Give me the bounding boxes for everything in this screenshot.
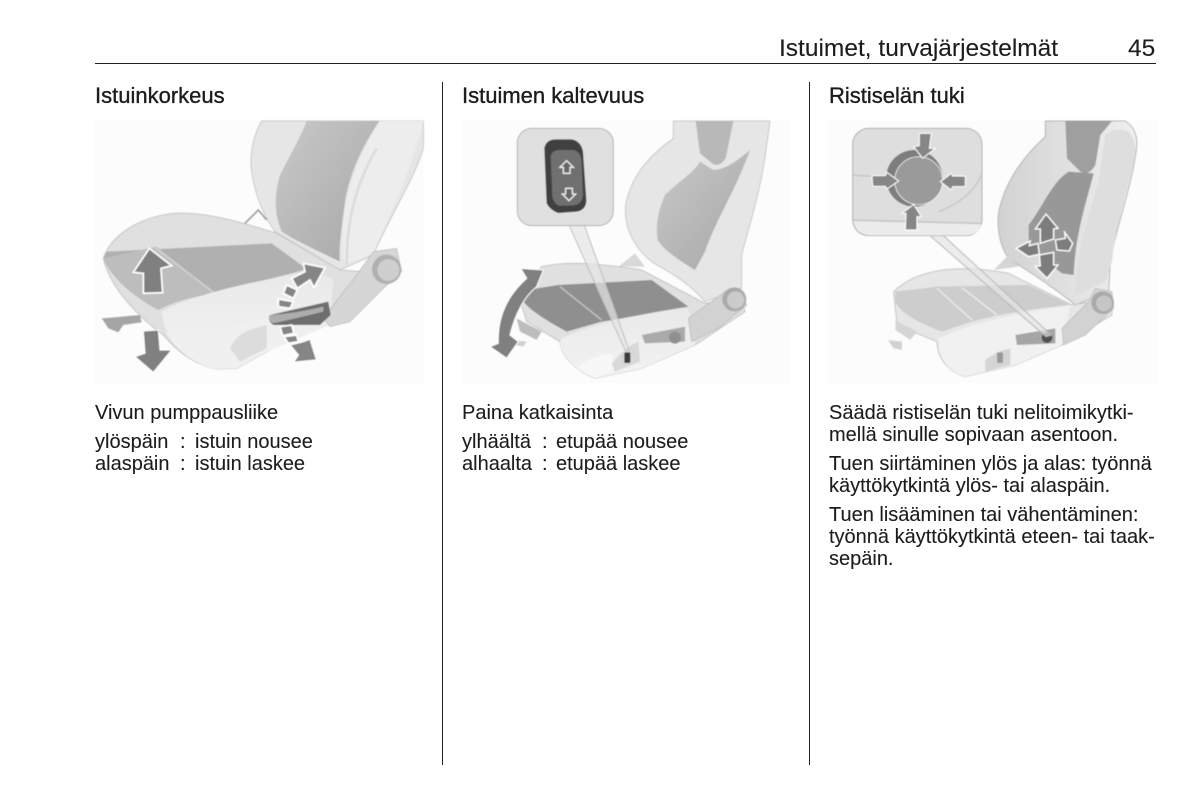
callout: lumbar switch	[853, 128, 982, 236]
callout pointer	[929, 235, 1051, 337]
text block: seat tilt: :	[542, 453, 548, 475]
text block: lumbar support: Tuen siirtäminen ylös ja alas: työnnä	[829, 453, 1152, 475]
text block: seat tilt: :	[542, 431, 548, 453]
text block: lumbar support: Tuen lisääminen tai vähentäminen:	[829, 504, 1138, 526]
text block: seat height: istuin laskee	[195, 453, 305, 475]
text block: seat height: Vivun pumppausliike	[95, 402, 278, 424]
text block: seat tilt	[462, 402, 688, 475]
text block: lumbar support: mellä sinulle sopivaan asentoon.	[829, 424, 1118, 446]
text block: seat height: alaspäin	[95, 453, 170, 475]
text block: seat tilt: etupää laskee	[556, 453, 681, 475]
text block: lumbar support: työnnä käyttökytkintä eteen- tai taak-	[829, 526, 1155, 548]
page header: Istuimet, turvajärjestelmät	[779, 35, 1058, 62]
text block: seat height	[95, 402, 313, 475]
illustration: lumbar support	[829, 121, 1157, 383]
callout pointer	[569, 225, 629, 350]
text block: seat tilt: ylhäältä	[462, 431, 531, 453]
text block: seat tilt: etupää nousee	[556, 431, 688, 453]
text block: lumbar support: Säädä ristiselän tuki nelitoimikytki-	[829, 402, 1134, 424]
text block: lumbar support	[829, 402, 1155, 570]
heading: Istuimen kaltevuus: Istuimen kaltevuus	[462, 83, 644, 108]
page header: 45	[1128, 35, 1155, 62]
text block: seat height: istuin nousee	[195, 431, 313, 453]
text block: seat height: ylöspäin	[95, 431, 168, 453]
text block: seat height: :	[180, 431, 186, 453]
illustration: seat height	[95, 121, 423, 383]
text block: seat height: :	[180, 453, 186, 475]
arrows: lumbar four-way	[1016, 214, 1073, 278]
callout: switch	[517, 128, 613, 226]
text block: seat tilt: Paina katkaisinta	[462, 402, 613, 424]
heading: Istuinkorkeus: Istuinkorkeus	[95, 83, 225, 108]
text block: lumbar support: käyttökytkintä ylös- tai alaspäin.	[829, 475, 1110, 497]
arrow: down	[135, 330, 172, 372]
arrow: lever up	[292, 263, 325, 288]
text block: lumbar support: sepäin.	[829, 548, 894, 570]
heading: Ristiselän tuki: Ristiselän tuki	[829, 83, 965, 108]
arrow: curved tilt	[490, 268, 543, 358]
arrow: up	[133, 248, 172, 293]
illustration: seat tilt	[462, 121, 790, 383]
arrow: lever down	[280, 325, 298, 343]
text block: seat tilt: alhaalta	[462, 453, 532, 475]
